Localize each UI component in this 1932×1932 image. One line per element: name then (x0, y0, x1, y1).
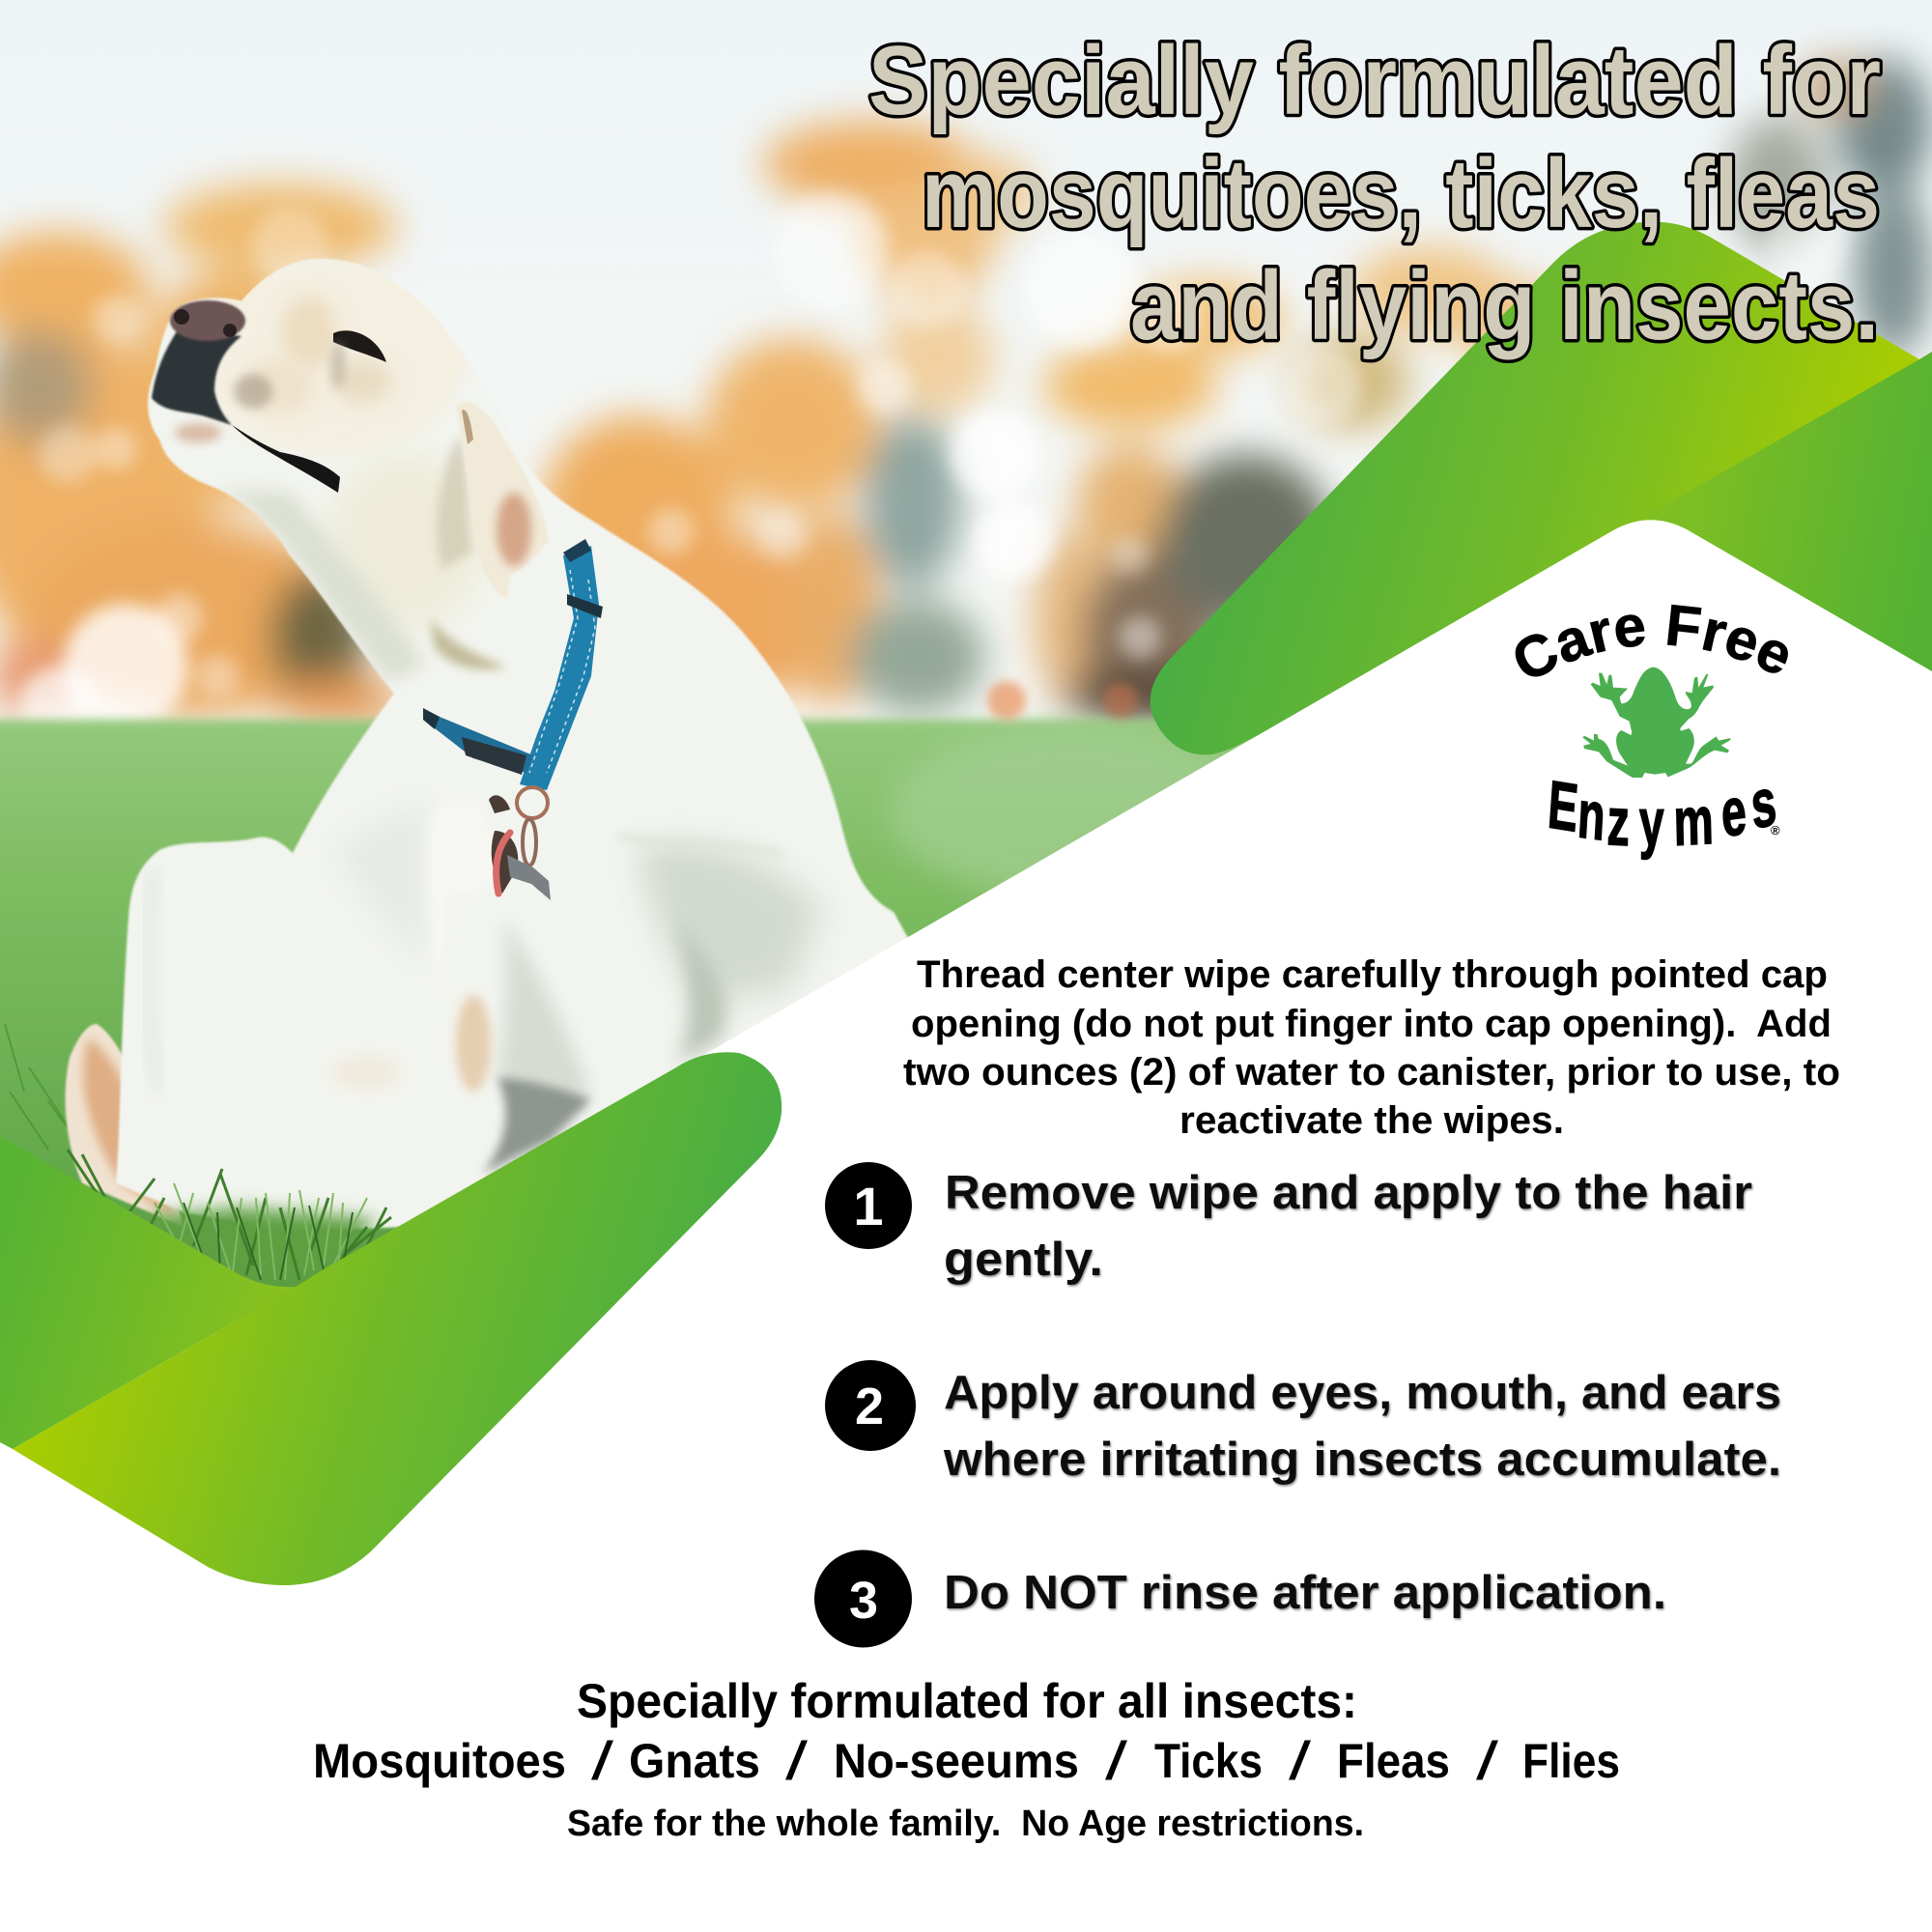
step 1 text: gently. (944, 1234, 1103, 1286)
collar rings and tag (489, 787, 551, 900)
logo wordmark bottom: Enzymes (1546, 762, 1779, 861)
lawn blades near lower left (5, 1024, 87, 1154)
instructions paragraph: reactivate the wipes. (1179, 1099, 1564, 1142)
white panel (0, 520, 1932, 1932)
insect list: Ticks (1154, 1734, 1263, 1788)
step 2 text (943, 1367, 1781, 1486)
instructions paragraph: two ounces (2) of water to canister, prior to use, to (903, 1051, 1840, 1094)
insect list: No-seeums (834, 1734, 1079, 1788)
logo wordmark top: Care Free (1515, 605, 1788, 676)
photo background: blurred park (0, 0, 1932, 1546)
step 2 badge: 2 (855, 1378, 884, 1435)
photo: white labrador dog scratching (66, 259, 913, 1290)
ear (456, 402, 549, 599)
green ribbon: top right (1628, 352, 1932, 696)
step 1 text: Remove wipe and apply to the hair (945, 1167, 1752, 1219)
tail (66, 1024, 184, 1227)
insect list: / (1476, 1730, 1499, 1791)
instructions paragraph: opening (do not put finger into cap opening). Add (911, 1003, 1832, 1045)
green ribbon: bottom lime (13, 1052, 781, 1585)
blue collar (423, 539, 603, 790)
grass tufts (68, 1150, 391, 1290)
muzzle, nose, eye and mouth (152, 300, 386, 493)
green ribbon: bottom left dark (0, 1136, 296, 1449)
body silhouette (116, 259, 913, 1232)
green ribbon: top lime (1151, 222, 1919, 754)
safety note: Safe for the whole family. No Age restrictions. (567, 1804, 1364, 1844)
step 2 text: where irritating insects accumulate. (943, 1434, 1781, 1486)
step 1 (825, 1162, 1752, 1286)
step 2 badge (825, 1360, 916, 1451)
step 1 text (944, 1167, 1752, 1286)
step 1 badge (825, 1162, 912, 1249)
step 1 badge: 1 (853, 1176, 884, 1236)
step 2 (825, 1360, 1781, 1486)
insect list: / (1289, 1730, 1312, 1791)
insect list: / (785, 1730, 809, 1791)
step 3 text: Do NOT rinse after application. (944, 1567, 1666, 1619)
logo: Care Free Enzymes (1515, 605, 1788, 861)
footer heading: Specially formulated for all insects: (577, 1674, 1357, 1728)
insect list: / (591, 1730, 614, 1791)
instructions paragraph (903, 953, 1840, 1142)
insect list: Gnats (629, 1734, 760, 1788)
registered mark: ® (1771, 823, 1780, 838)
insect list: Flies (1522, 1734, 1620, 1788)
insect list: Fleas (1337, 1734, 1450, 1788)
fur shading and markings (148, 261, 821, 1174)
icon: green frog (1582, 668, 1731, 778)
insect list (313, 1730, 1620, 1791)
step 2 text: Apply around eyes, mouth, and ears (944, 1367, 1781, 1419)
step 3 (814, 1549, 1666, 1648)
step 3 badge: 3 (849, 1572, 878, 1630)
insect list: Mosquitoes (313, 1734, 566, 1788)
instructions paragraph: Thread center wipe carefully through pointed cap (917, 953, 1828, 996)
step 3 badge (814, 1549, 912, 1648)
title (868, 27, 1881, 360)
insect list: / (1105, 1730, 1128, 1791)
